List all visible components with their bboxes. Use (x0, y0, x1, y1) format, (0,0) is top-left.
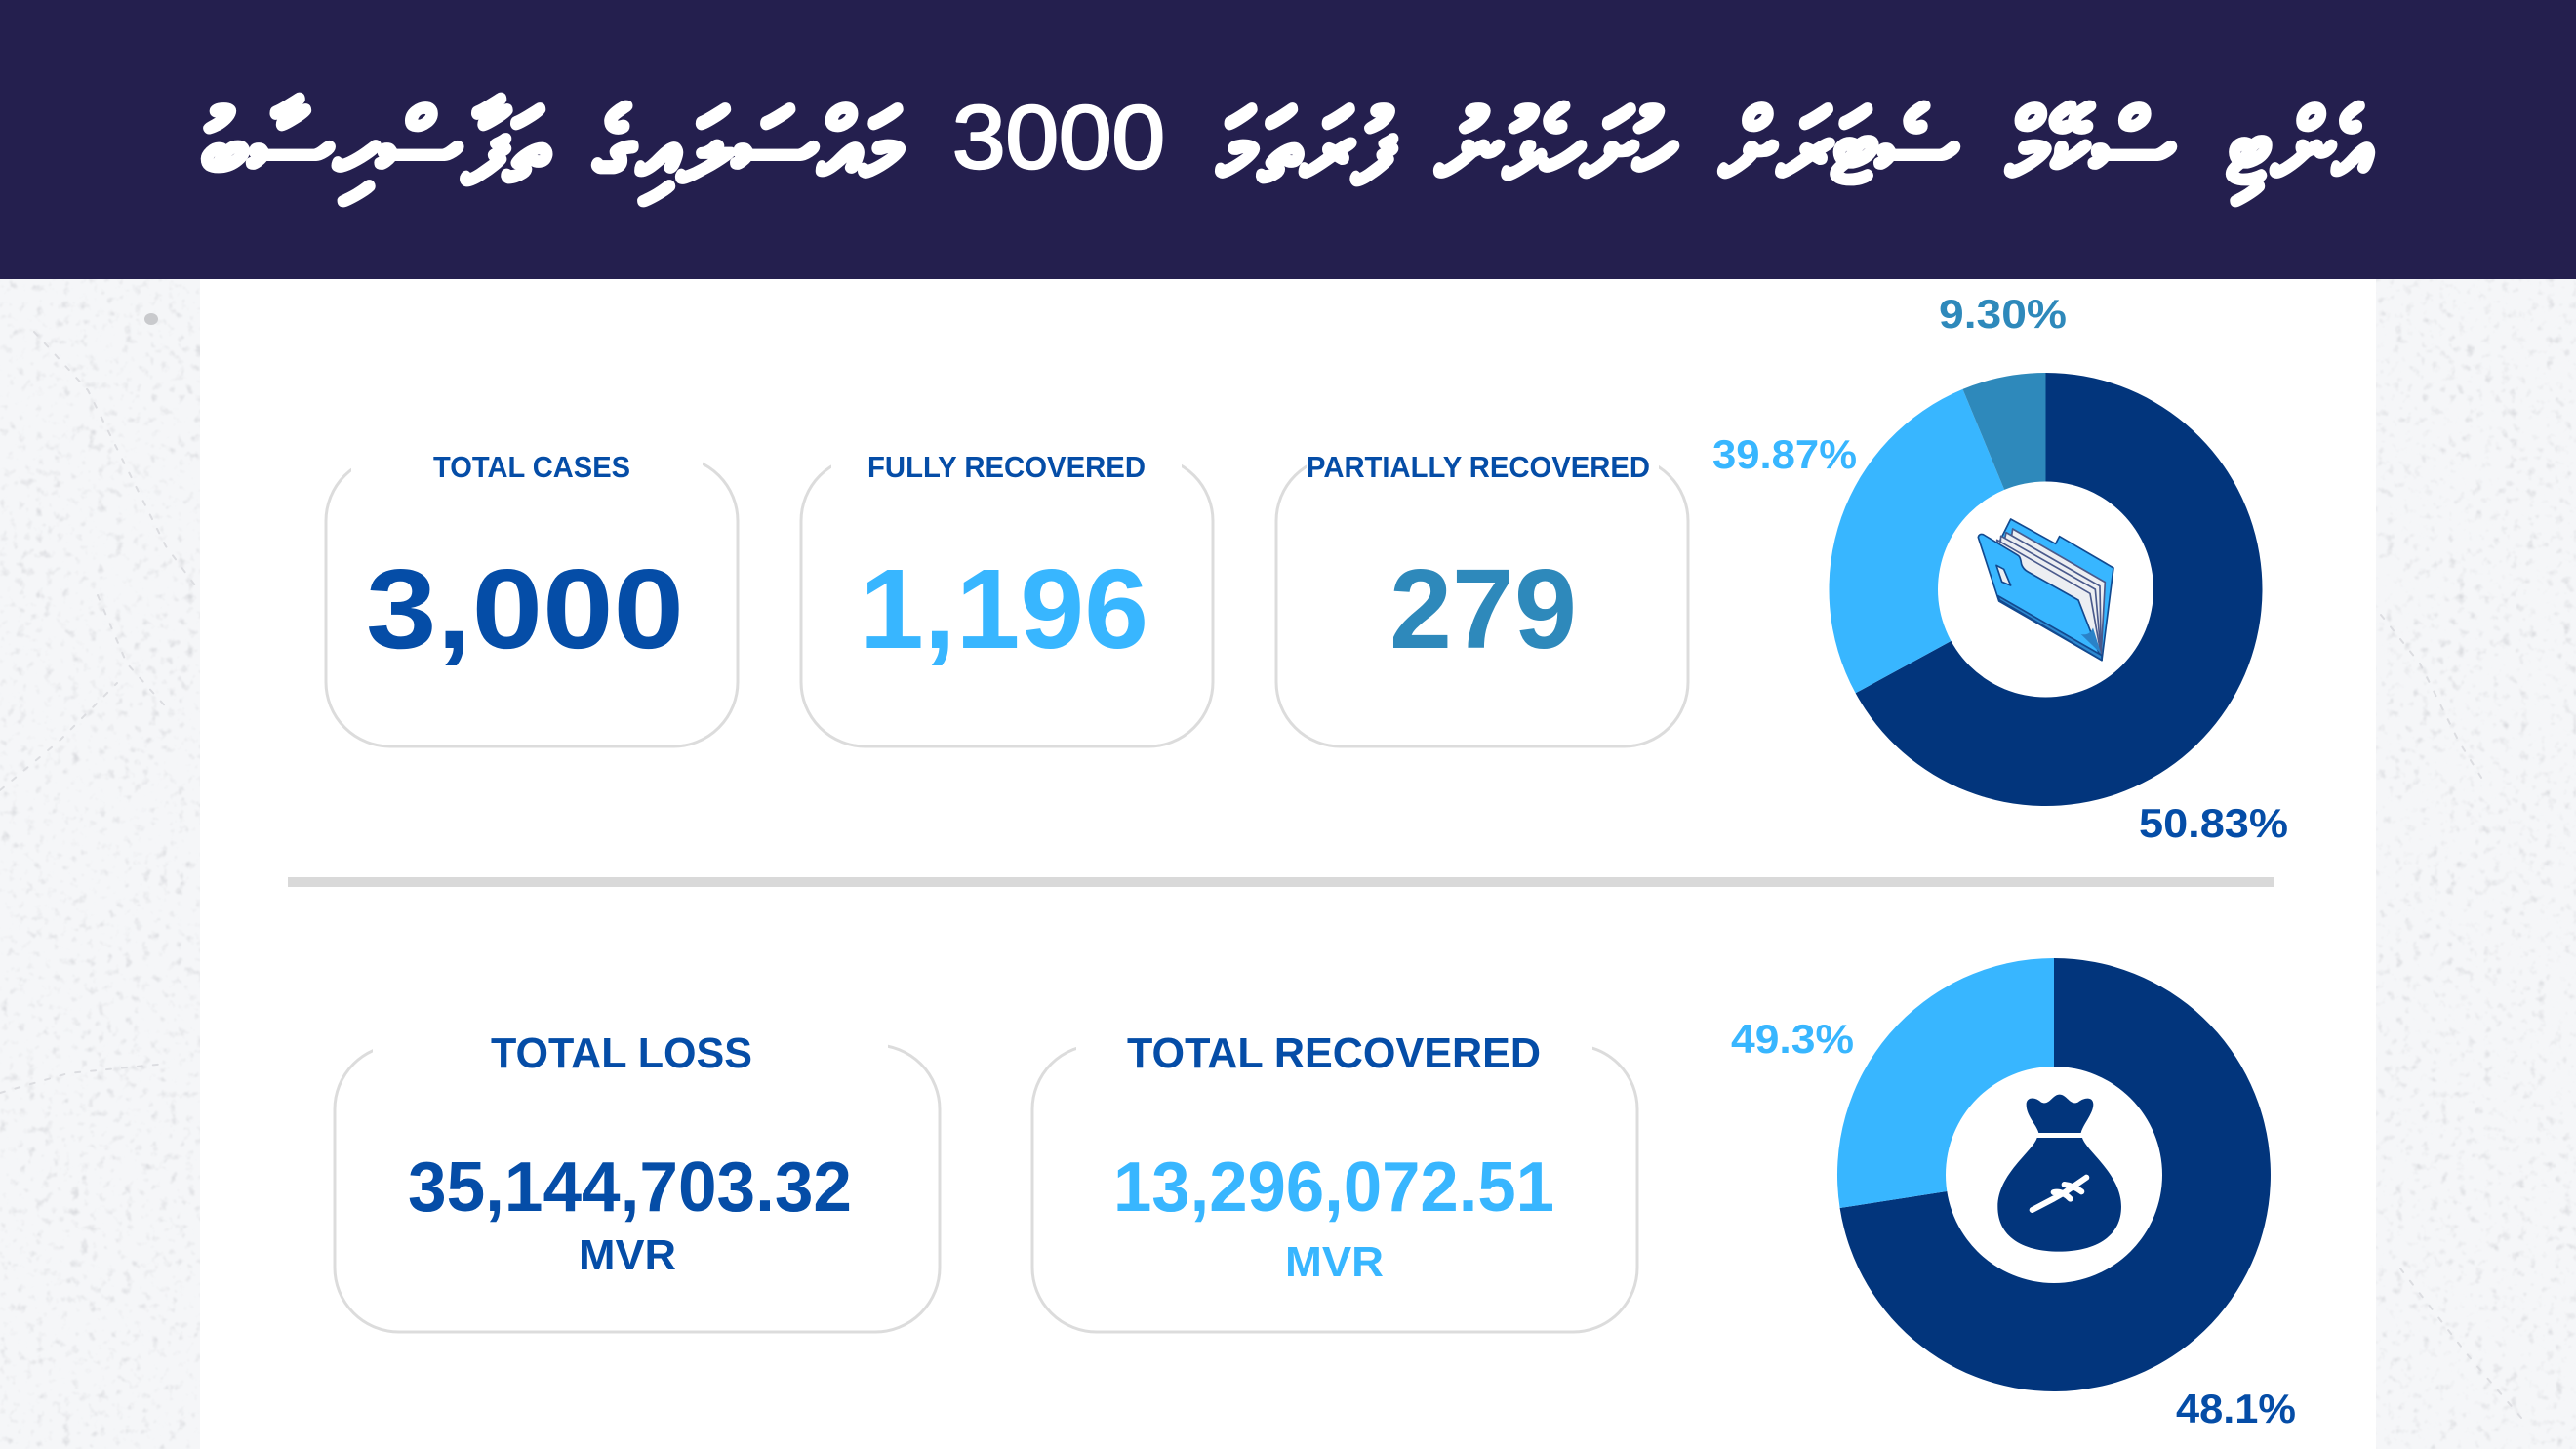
icon: money bag (1997, 1095, 2121, 1252)
title: 3000 (952, 88, 1165, 187)
percentage label: 49.3%: 49.3% (1731, 1016, 1854, 1062)
white content panel (200, 273, 2376, 1449)
icon: folder (1978, 519, 2113, 661)
card: total recovered (1032, 1025, 1637, 1332)
card: total loss: TOTAL LOSS (491, 1029, 752, 1077)
card: total loss: MVR (579, 1231, 676, 1279)
title (202, 88, 2374, 206)
header band (0, 0, 2576, 279)
card: total cases: TOTAL CASES (433, 450, 630, 484)
title: ސެޓަރަށް (1718, 92, 1959, 205)
divider (288, 877, 2274, 887)
card: fully recovered (801, 439, 1213, 746)
percentage label: 50.83%: 50.83% (2139, 800, 2288, 846)
card: fully recovered: 1,196 (860, 545, 1148, 672)
card: total cases: 3,000 (366, 545, 684, 672)
card: total recovered: MVR (1285, 1238, 1384, 1286)
title: ސްކޭމް (2005, 92, 2176, 205)
percentage label: 39.87%: 39.87% (1712, 431, 1857, 477)
card: total recovered: TOTAL RECOVERED (1127, 1029, 1541, 1077)
card: total recovered: 13,296,072.51 (1113, 1148, 1554, 1227)
card: total loss: 35,144,703.32 (408, 1148, 852, 1227)
title: ތަފާސްހިސާބު (202, 92, 551, 206)
card: partially recovered: PARTIALLY RECOVERED (1307, 450, 1650, 484)
card: partially recovered: 279 (1389, 545, 1577, 672)
card: total cases (326, 439, 738, 746)
donut chart: money (1837, 958, 2271, 1391)
card: partially recovered (1276, 439, 1688, 746)
title: އެންޓި (2227, 92, 2374, 206)
card: total loss (335, 1025, 940, 1332)
percentage label: 48.1%: 48.1% (2176, 1386, 2296, 1431)
donut chart: cases (1829, 373, 2262, 806)
card: fully recovered: FULLY RECOVERED (867, 450, 1146, 484)
percentage label: 9.30%: 9.30% (1939, 291, 2067, 337)
title: ފުރަތަމަ (1216, 92, 1397, 205)
title: މައްސަލައިގެ (592, 92, 905, 206)
title: ހުށަހެޅުނު (1434, 92, 1678, 205)
